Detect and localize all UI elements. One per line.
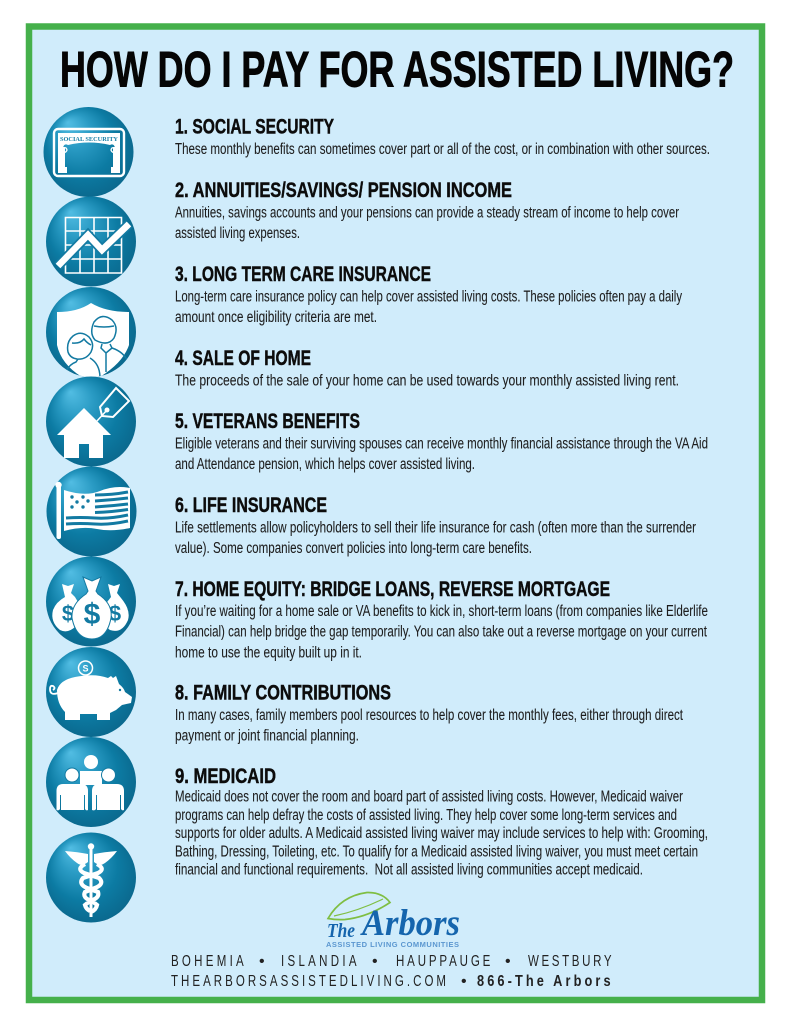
icon: piggy bank with coin — [46, 647, 136, 737]
section 9: medicaid — [175, 765, 708, 878]
section 8: family contributions: 8. FAMILY CONTRIBUTIONS — [175, 682, 391, 704]
icon: chart with rising arrow — [46, 196, 136, 286]
footer: website and phone: • — [461, 973, 467, 990]
icon: house with price tag — [46, 376, 136, 466]
section 5: veterans benefits — [175, 410, 708, 473]
footer: website and phone: 866-The Arbors — [477, 973, 611, 990]
logo: The Arbors: Arbors — [360, 903, 460, 944]
footer: locations: • — [372, 953, 378, 970]
footer: locations: ISLANDIA — [281, 951, 357, 969]
footer: locations — [171, 951, 612, 970]
section 7: home equity: home to use the equity built up in it. — [175, 644, 362, 661]
icon: money bags: $ — [62, 601, 74, 626]
section 1: social security — [175, 116, 710, 158]
footer: website and phone — [171, 971, 611, 990]
icon: money bags: $ — [109, 601, 121, 626]
section 6: life insurance: value). Some companies convert policies into long-term care benefits. — [175, 540, 532, 557]
section 8: family contributions — [175, 682, 684, 745]
section 1: social security: 1. SOCIAL SECURITY — [175, 116, 334, 138]
icon: money bags — [46, 556, 136, 646]
section 6: life insurance — [175, 494, 696, 557]
section 2: annuities, savings, pension: 2. ANNUITIES/SAVINGS/ PENSION INCOME — [175, 179, 512, 202]
section 5: veterans benefits: 5. VETERANS BENEFITS — [175, 410, 360, 433]
footer: website and phone: THEARBORSASSISTEDLIVING.COM — [171, 971, 446, 989]
footer: locations: WESTBURY — [528, 951, 612, 969]
section 3: long term care insurance: 3. LONG TERM CARE INSURANCE — [175, 263, 431, 286]
section 7: home equity: 7. HOME EQUITY: BRIDGE LOANS, REVERSE MORTGAGE — [175, 578, 610, 601]
section 2: annuities, savings, pension — [175, 179, 679, 242]
section 3: long term care insurance: amount once eligibility criteria are met. — [175, 309, 377, 326]
icon: social security card: SOCIAL SECURITY — [60, 136, 118, 143]
footer: locations: • — [259, 953, 265, 970]
section 2: annuities, savings, pension: assisted living expenses. — [175, 225, 300, 242]
icon: american flag — [46, 466, 136, 556]
icon: family group — [46, 737, 136, 827]
footer: locations: HAUPPAUGE — [396, 951, 490, 969]
icon: money bags: $ — [84, 598, 101, 631]
section 8: family contributions: payment or joint financial planning. — [175, 728, 359, 745]
section 5: veterans benefits: and Attendance pension, which helps cover assisted living. — [175, 456, 475, 473]
logo: The Arbors — [326, 892, 460, 949]
section 3: long term care insurance — [175, 263, 682, 326]
section 6: life insurance: 6. LIFE INSURANCE — [175, 494, 327, 517]
icon: shield with couple — [46, 287, 136, 382]
icon: caduceus — [46, 832, 136, 922]
icon: piggy bank with coin: S — [82, 664, 89, 674]
icon: social security card — [44, 107, 134, 197]
section 9: medicaid: financial and functional requirements. Not all assisted living communities accept medicaid. — [175, 862, 643, 878]
section 4: sale of home: 4. SALE OF HOME — [175, 347, 311, 370]
footer: locations: BOHEMIA — [171, 951, 244, 969]
section 4: sale of home — [175, 347, 679, 390]
logo: The Arbors: ASSISTED LIVING COMMUNITIES — [326, 940, 459, 949]
section 7: home equity — [175, 578, 708, 661]
section 9: medicaid: 9. MEDICAID — [175, 765, 276, 788]
footer: locations: • — [505, 953, 511, 970]
logo: The Arbors: The — [327, 920, 355, 942]
